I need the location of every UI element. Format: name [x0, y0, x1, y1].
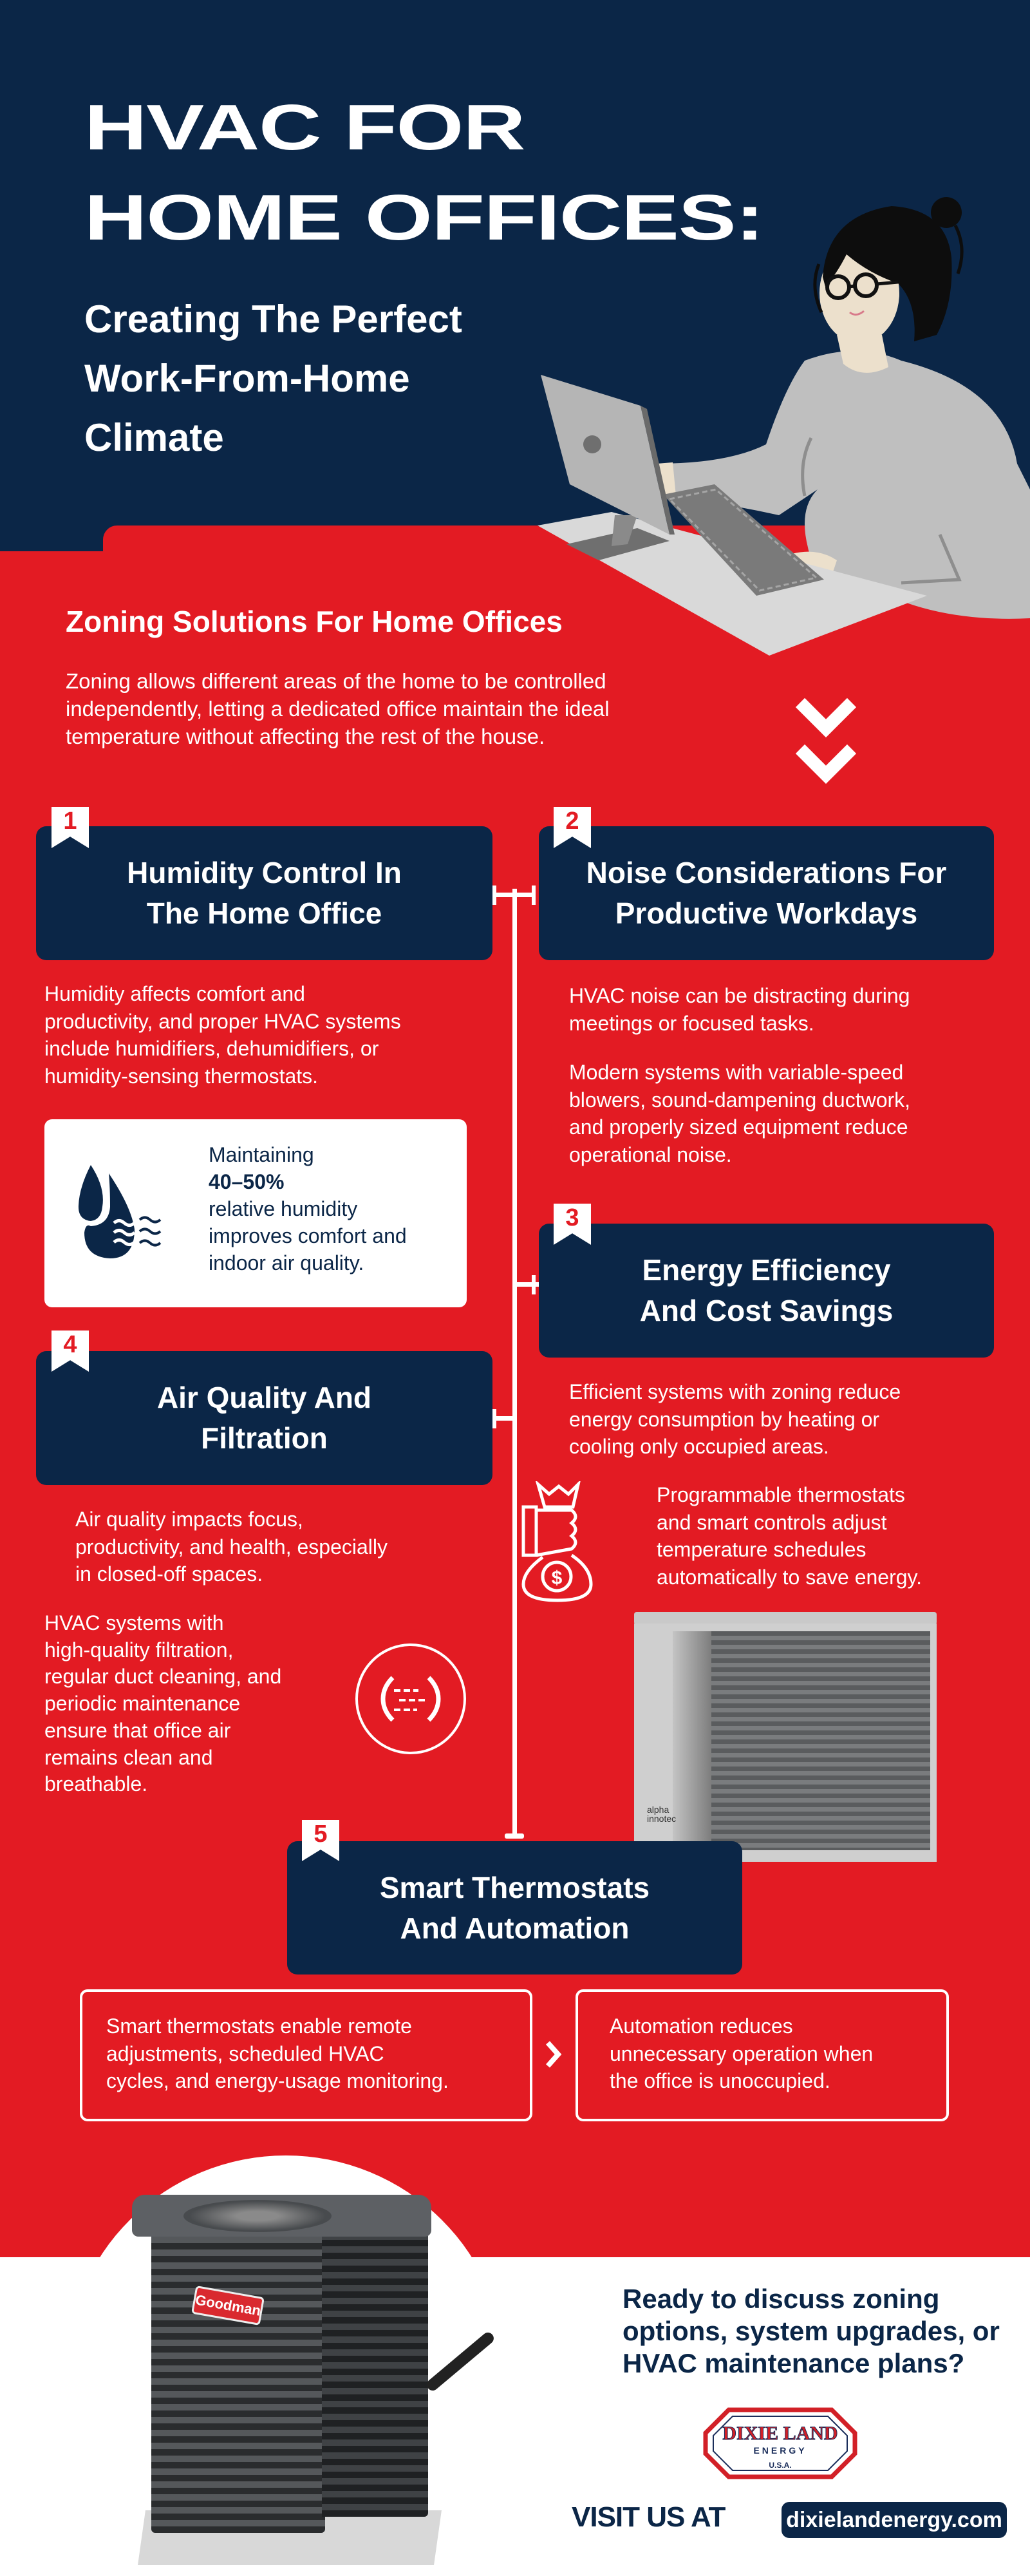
footer white area — [0, 2257, 1030, 2576]
panel 3: energy — [539, 1224, 994, 1358]
callout text: improves comfort and — [209, 1224, 407, 1247]
text 4b: high-quality filtration, — [44, 1638, 233, 1662]
icon: money bag — [521, 1481, 592, 1602]
card A: Smart thermostats enable remote — [106, 2014, 412, 2038]
text 3: Efficient systems with zoning reduce — [569, 1380, 901, 1403]
visit us: VISIT US AT — [572, 2501, 725, 2533]
panel 1: humidity: Humidity Control In — [127, 856, 402, 889]
logo: Dixie Land Energy: DIXIE LAND — [722, 2423, 838, 2444]
panel 1: humidity — [36, 826, 492, 960]
text 3: energy consumption by heating or — [569, 1408, 879, 1431]
card B: the office is unoccupied. — [610, 2069, 830, 2092]
text 2 — [569, 984, 910, 1166]
zoning body — [66, 669, 610, 748]
card A: cycles, and energy-usage monitoring. — [106, 2069, 449, 2092]
panel 5: smart thermostats: Smart Thermostats — [380, 1870, 650, 1904]
badge 1 — [52, 807, 89, 848]
text 2: HVAC noise can be distracting during — [569, 984, 910, 1007]
text: programmable — [657, 1483, 922, 1588]
logo: Dixie Land Energy: U.S.A. — [769, 2461, 792, 2470]
CTA text: Ready to discuss zoning — [623, 2284, 939, 2314]
desk — [538, 512, 927, 656]
text 4a: in closed-off spaces. — [75, 1562, 263, 1586]
panel 2: noise — [539, 826, 994, 960]
zoning heading: Zoning Solutions For Home Offices — [66, 605, 563, 638]
sweater body — [657, 351, 1030, 619]
monitor — [566, 528, 670, 560]
text 4b — [44, 1611, 281, 1795]
text 2: blowers, sound-dampening ductwork, — [569, 1088, 910, 1112]
text 4a: productivity, and health, especially — [75, 1535, 388, 1558]
badge 4 — [52, 1331, 89, 1372]
callout text — [209, 1143, 407, 1274]
panel 4: air quality: Air Quality And — [157, 1381, 371, 1414]
hair — [823, 206, 952, 341]
text 2: meetings or focused tasks. Modern systems with variable-speed — [569, 1011, 903, 1084]
text 4b: periodic maintenance — [44, 1692, 240, 1715]
keyboard — [663, 484, 824, 596]
image: Goodman AC unit: Goodman — [194, 2291, 262, 2319]
arrow: chevron — [546, 2041, 561, 2068]
text: programmable: automatically to save energy. — [657, 1565, 922, 1588]
badge 5: 5 — [314, 1821, 328, 1848]
text 4b: remains clean and — [44, 1746, 212, 1769]
card B: unnecessary operation when — [610, 2041, 873, 2065]
url pill — [782, 2502, 1007, 2538]
text 4b: regular duct cleaning, and — [44, 1665, 281, 1688]
badge 5 — [302, 1820, 339, 1861]
text 4b: ensure that office air — [44, 1719, 230, 1742]
neck & face — [837, 335, 888, 373]
red tab — [103, 526, 1030, 564]
card B: Automation reduces — [610, 2014, 793, 2038]
text 1: humidity-sensing thermostats. — [44, 1064, 318, 1087]
callout text: relative humidity — [209, 1197, 357, 1220]
card A: adjustments, scheduled HVAC — [106, 2041, 384, 2065]
image: alpha innotec heat pump: innotec — [647, 1814, 676, 1824]
panel 3: energy: And Cost Savings — [640, 1294, 893, 1327]
panel 1: humidity: The Home Office — [147, 896, 382, 930]
panel 2: noise: Noise Considerations For — [586, 856, 946, 889]
glasses — [827, 276, 849, 298]
connectors — [492, 893, 536, 897]
subtitle: Climate — [84, 416, 224, 459]
badge 3 — [554, 1204, 591, 1245]
badge 2: 2 — [565, 808, 579, 835]
badge 3: 3 — [565, 1204, 579, 1231]
subtitle — [84, 298, 462, 459]
text 4b: breathable. — [44, 1772, 147, 1795]
zoning body: Zoning allows different areas of the home to be controlled — [66, 669, 606, 693]
zoning body: temperature without affecting the rest of the house. — [66, 724, 545, 748]
callout text: indoor air quality. — [209, 1251, 364, 1274]
logo: Dixie Land Energy — [703, 2407, 857, 2479]
card A — [80, 1989, 532, 2121]
title: HVAC FOR — [84, 91, 525, 164]
white hump — [66, 2155, 506, 2374]
callout: humidity — [44, 1119, 467, 1307]
title: HOME OFFICES: — [84, 182, 763, 254]
icon: air circle — [355, 1643, 466, 1754]
text 4b: HVAC systems with — [44, 1611, 224, 1634]
header background — [0, 0, 1030, 551]
hands — [657, 462, 676, 497]
badge 4: 4 — [63, 1331, 77, 1358]
text: programmable: and smart controls adjust — [657, 1511, 887, 1534]
timeline line — [512, 889, 517, 1837]
badge 1: 1 — [63, 808, 77, 835]
badge 2 — [554, 807, 591, 848]
illustration: woman at computer — [538, 197, 1030, 656]
panel 5: smart thermostats: And Automation — [400, 1911, 630, 1945]
text 4a — [75, 1508, 388, 1586]
image: Goodman AC unit — [132, 2195, 494, 2565]
text 2: operational noise. — [569, 1142, 732, 1166]
image: alpha innotec heat pump: alpha — [647, 1804, 669, 1815]
text: programmable: temperature schedules — [657, 1538, 866, 1561]
icon: water drops — [79, 1165, 161, 1258]
url pill: dixielandenergy.com — [786, 2508, 1002, 2532]
text 1: Humidity affects comfort and — [44, 982, 305, 1005]
CTA text: HVAC maintenance plans? — [623, 2348, 964, 2378]
text 4a: Air quality impacts focus, — [75, 1508, 303, 1531]
callout text: 40–50% — [209, 1170, 284, 1193]
title — [84, 91, 763, 254]
text 2: and properly sized equipment reduce — [569, 1115, 908, 1139]
text 3: cooling only occupied areas. — [569, 1435, 829, 1458]
text: programmable: Programmable thermostats — [657, 1483, 905, 1506]
card B — [576, 1989, 949, 2121]
panel 2: noise: Productive Workdays — [615, 896, 917, 930]
logo: Dixie Land Energy: ENERGY — [753, 2445, 807, 2456]
image: alpha innotec heat pump — [634, 1612, 937, 1862]
panel 3: energy: Energy Efficiency — [642, 1253, 891, 1287]
text 1: productivity, and proper HVAC systems — [44, 1010, 401, 1033]
zoning body: independently, letting a dedicated office maintain the ideal — [66, 697, 610, 721]
CTA text: options, system upgrades, or — [623, 2316, 1000, 2346]
subtitle: Creating The Perfect — [84, 298, 462, 341]
panel 5: smart thermostats — [287, 1841, 742, 1975]
icon: down chevrons — [796, 698, 856, 784]
text 3 — [569, 1380, 901, 1458]
text 1 — [44, 982, 401, 1087]
text 1: include humidifiers, dehumidifiers, or — [44, 1037, 379, 1060]
panel 4: air quality: Filtration — [201, 1421, 328, 1455]
CTA text — [623, 2284, 1000, 2378]
callout text: Maintaining — [209, 1143, 314, 1166]
panel 4: air quality — [36, 1351, 492, 1485]
icon: money bag: $ — [552, 1567, 563, 1589]
subtitle: Work-From-Home — [84, 357, 410, 400]
